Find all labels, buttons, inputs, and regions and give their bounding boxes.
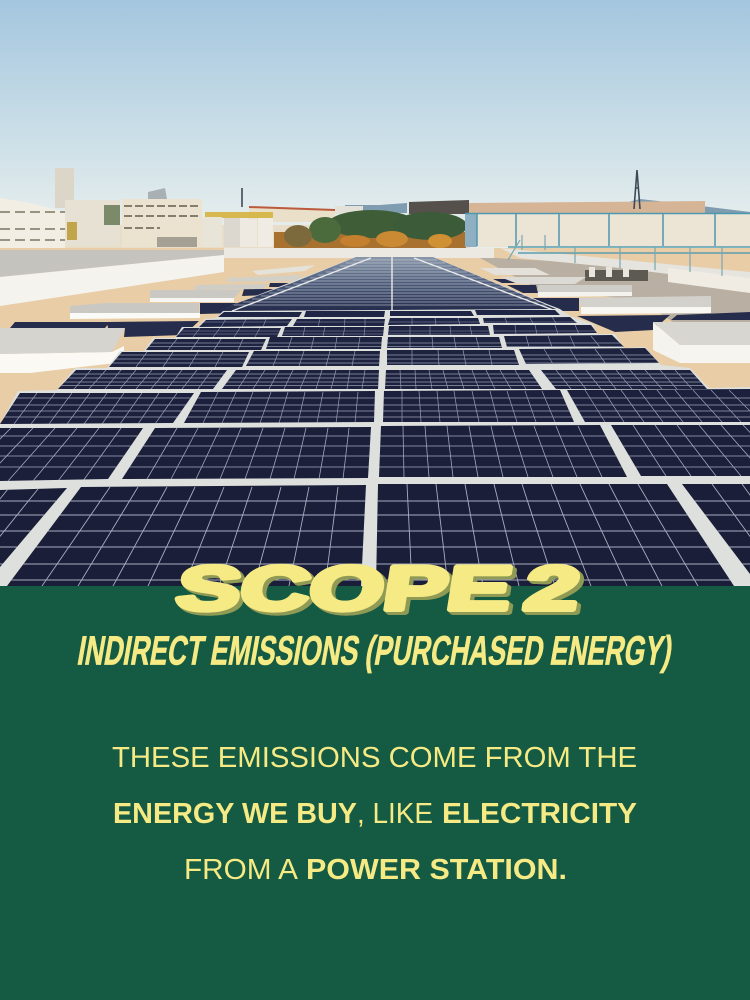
body line 2 (113, 798, 637, 830)
solar row 1 (0, 483, 750, 587)
body line 2: , LIKE (357, 798, 433, 830)
left skylights (0, 265, 315, 373)
heading: scope 2: SCOPE (172, 555, 517, 623)
solar row 8 (199, 317, 577, 327)
left parapet wall (0, 255, 224, 306)
left roof (0, 250, 224, 277)
right roof surface (478, 257, 750, 362)
body line 3: POWER STATION. (306, 854, 567, 886)
photo: rooftop solar panels (0, 0, 750, 590)
distant hills (345, 199, 750, 216)
body line 1: THESE EMISSIONS COME FROM THE (112, 742, 637, 774)
solar row 9 (218, 310, 560, 317)
body line 3: FROM A (184, 854, 299, 886)
solar row 2 (0, 424, 750, 482)
solar row 5 (109, 348, 659, 367)
solar row 7 (176, 325, 597, 337)
skyline buildings (0, 168, 705, 250)
roof surface (0, 248, 750, 588)
solar row 3 (0, 388, 750, 425)
roof far edge (224, 248, 494, 258)
green panel (0, 586, 750, 1000)
body line 3 (184, 854, 567, 886)
solar row 4 (58, 370, 707, 389)
heading: scope 2 (172, 555, 585, 623)
pylons (242, 170, 640, 209)
sky (0, 0, 750, 260)
body line 2: ENERGY WE BUY (113, 798, 357, 830)
body text (112, 742, 637, 886)
body line 2: ELECTRICITY (442, 798, 637, 830)
right parapet and railing (500, 235, 750, 293)
distant solar rows (216, 257, 556, 311)
right skylights (480, 268, 750, 363)
heading: scope 2: 2 (520, 555, 585, 623)
trees (274, 210, 467, 248)
solar array frame (0, 257, 750, 590)
solar row 6 (146, 335, 624, 350)
side solar rows (10, 279, 750, 337)
teal warehouse (465, 213, 750, 247)
